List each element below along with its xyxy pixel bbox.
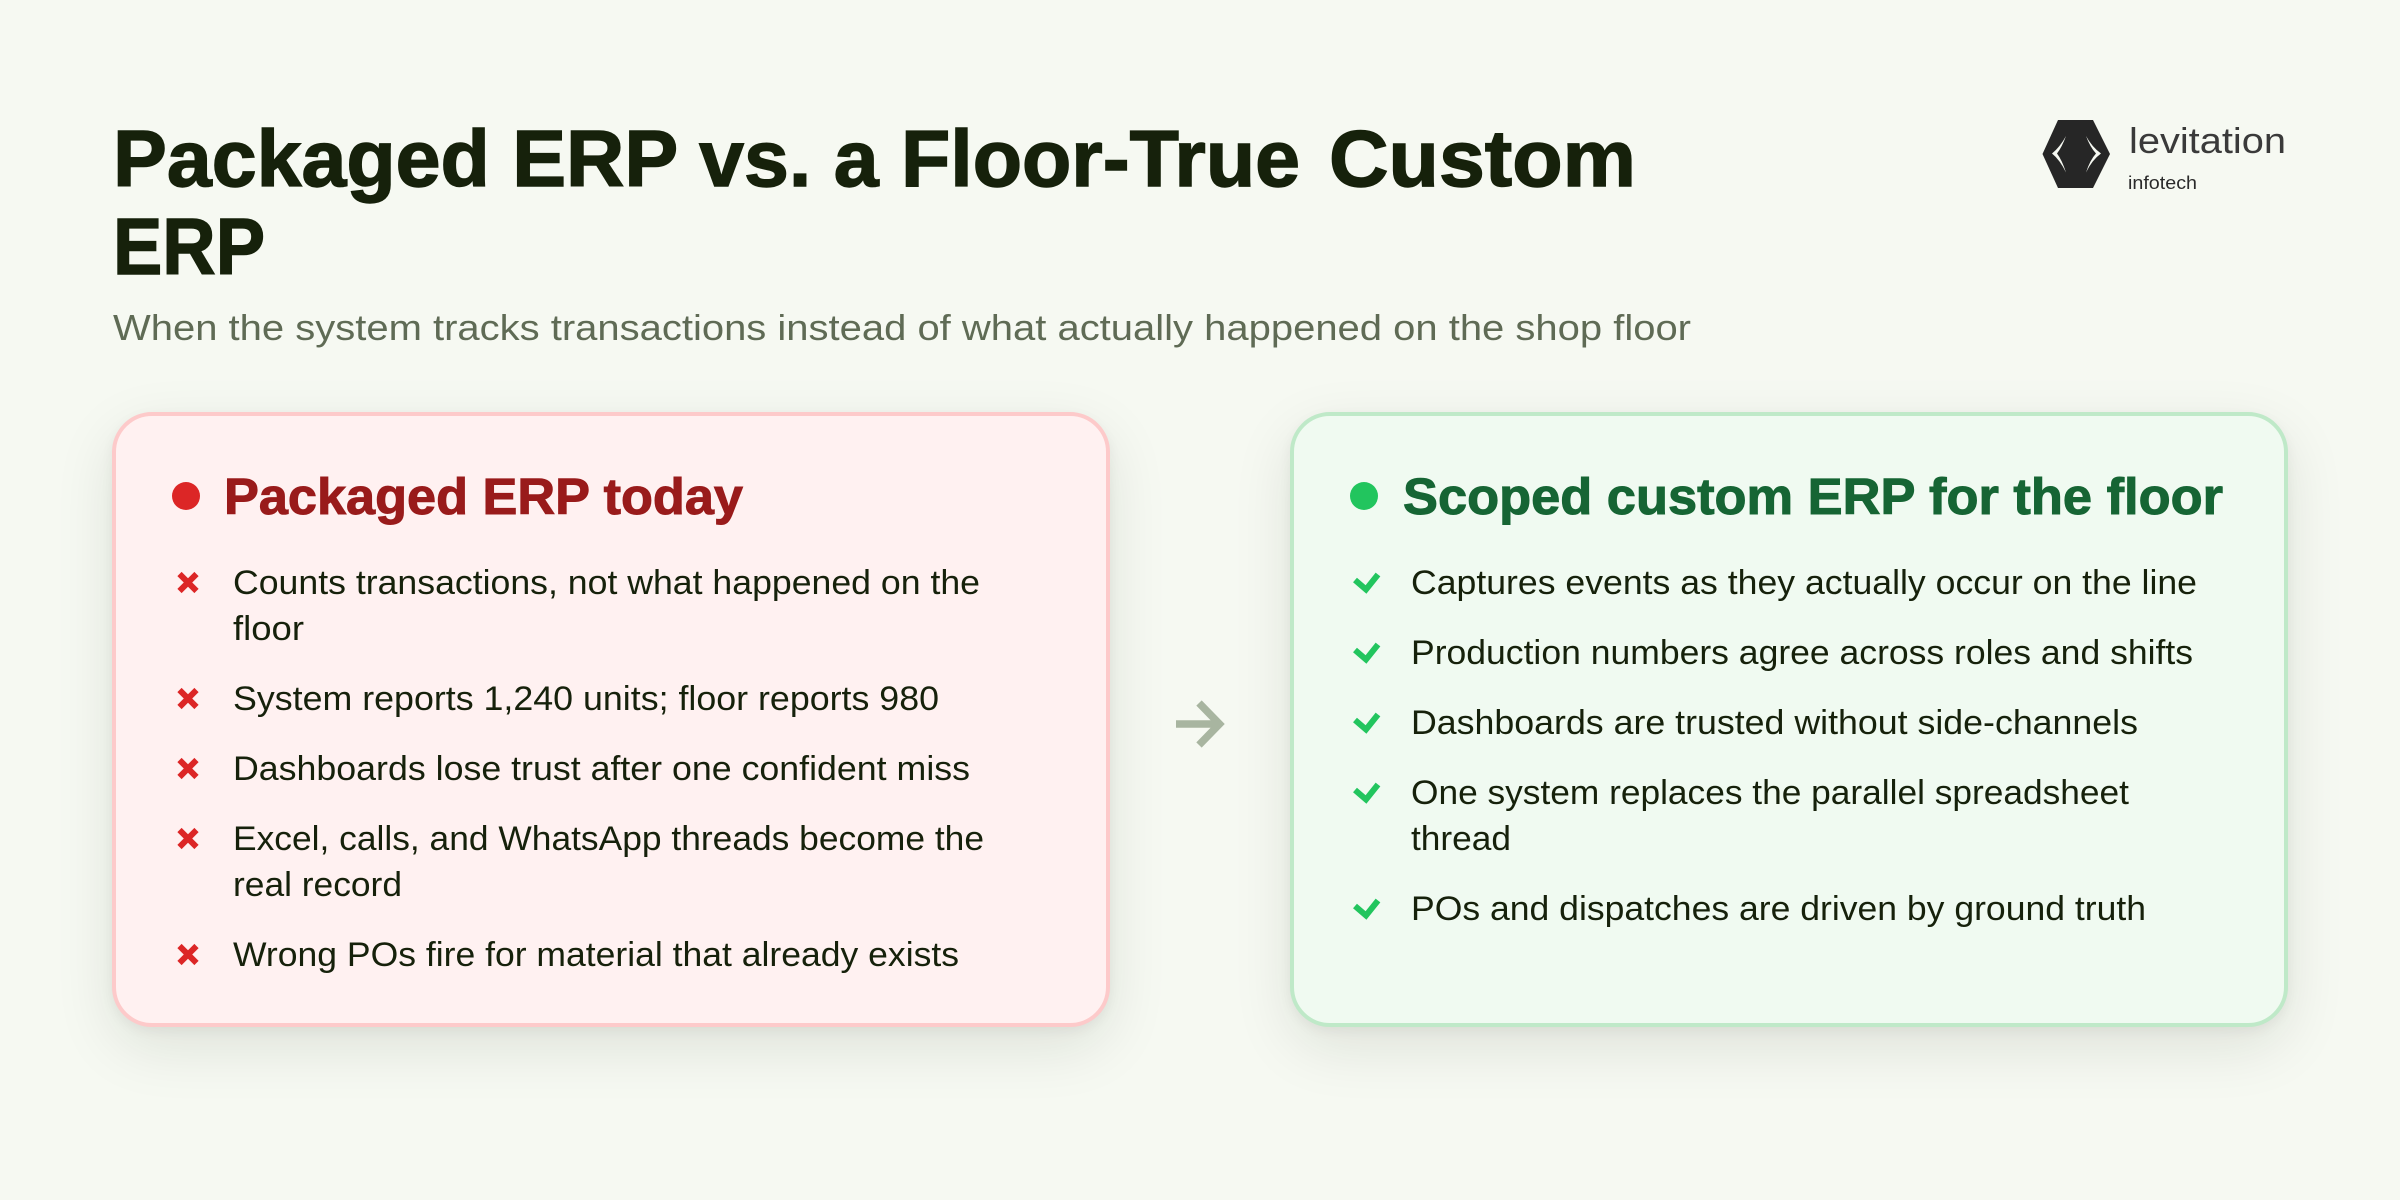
- item: dashboards trusted: Dashboards are trusted without side-channels: [1411, 704, 2138, 742]
- logo wordmark: levitation: [2129, 120, 2286, 161]
- panel: scoped custom ERP for the floor: [1350, 468, 2223, 928]
- panel: packaged ERP card background: [112, 412, 1110, 1027]
- item: excel and calls: Excel, calls, and WhatsApp threads become the: [233, 820, 984, 858]
- title: ERP: [113, 202, 265, 291]
- logo: levitation infotech: [2042, 120, 2286, 193]
- list: custom ERP benefits: [1355, 564, 2197, 928]
- item: captures events: Captures events as they actually occur on the line: [1411, 564, 2197, 602]
- logo sub-wordmark: infotech: [2128, 173, 2197, 193]
- list: packaged ERP problems: [180, 564, 984, 974]
- item: excel and calls: [180, 820, 984, 904]
- item: POs and dispatches: POs and dispatches are driven by ground truth: [1411, 890, 2146, 928]
- item: one system: [1355, 774, 2130, 858]
- item: dashboards lose trust: Dashboards lose trust after one confident miss: [233, 750, 970, 788]
- item: one system: thread: [1411, 820, 1511, 858]
- panel: custom ERP card background: [1290, 412, 2288, 1027]
- item: excel and calls: real record: [233, 866, 402, 904]
- heading: packaged ERP today: Packaged ERP today: [224, 468, 744, 525]
- item: system reports mismatch: System reports 1,240 units; floor reports 980: [233, 680, 939, 718]
- icon: hexagon logo mark: [2042, 120, 2110, 188]
- title: [113, 114, 1636, 291]
- item: one system: One system replaces the parallel spreadsheet: [1411, 774, 2130, 812]
- item: counts transactions: Counts transactions, not what happened on the: [233, 564, 980, 602]
- subtitle: When the system tracks transactions instead of what actually happened on the shop floor: [113, 307, 1691, 348]
- item: wrong POs: Wrong POs fire for material that already exists: [233, 936, 959, 974]
- panel: packaged ERP today: [172, 468, 984, 974]
- item: counts transactions: [180, 564, 980, 648]
- status dot: red: [172, 482, 200, 510]
- arrow: [1176, 703, 1220, 745]
- heading: scoped custom ERP: Scoped custom ERP for the floor: [1403, 468, 2223, 525]
- title: Custom: [1329, 114, 1636, 203]
- item: production numbers agree: Production numbers agree across roles and shifts: [1411, 634, 2193, 672]
- item: counts transactions: floor: [233, 610, 304, 648]
- status dot: green: [1350, 482, 1378, 510]
- title: Packaged ERP vs. a Floor-True: [113, 114, 1300, 203]
